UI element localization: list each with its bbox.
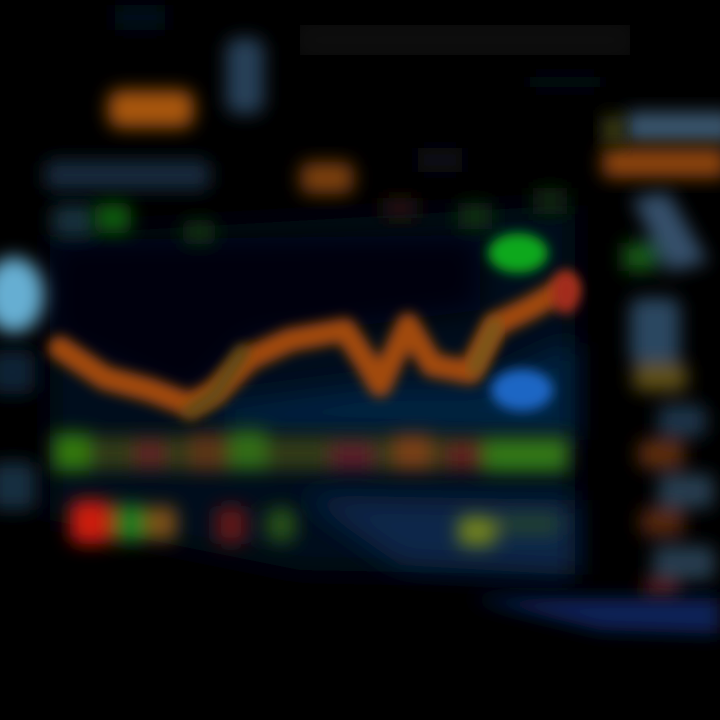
panel: left edge values: [0, 257, 44, 510]
chart: lower indicator row: [70, 500, 560, 546]
chart: green and red volume strip: [52, 430, 570, 472]
marker: blue highlight: [491, 369, 553, 411]
sidebar header: [625, 112, 720, 142]
icon: blue-grey tall label: [226, 38, 264, 114]
heading: top text blurs: [115, 5, 630, 89]
icon: orange label: [108, 90, 194, 128]
label: orange mid tag: [300, 162, 354, 194]
footer: blue bottom strip: [470, 598, 720, 634]
labels: dim header marks: [383, 148, 567, 229]
text block: blue-grey caption: [45, 160, 215, 244]
sidebar orange header: [602, 148, 720, 178]
panel: chart background: [50, 205, 575, 575]
marker: green highlight: [488, 233, 548, 273]
sidebar list items: [623, 192, 715, 602]
panel: right sidebar: [602, 112, 720, 602]
chart: orange price line: [60, 288, 565, 412]
marker: red line end: [552, 270, 580, 314]
